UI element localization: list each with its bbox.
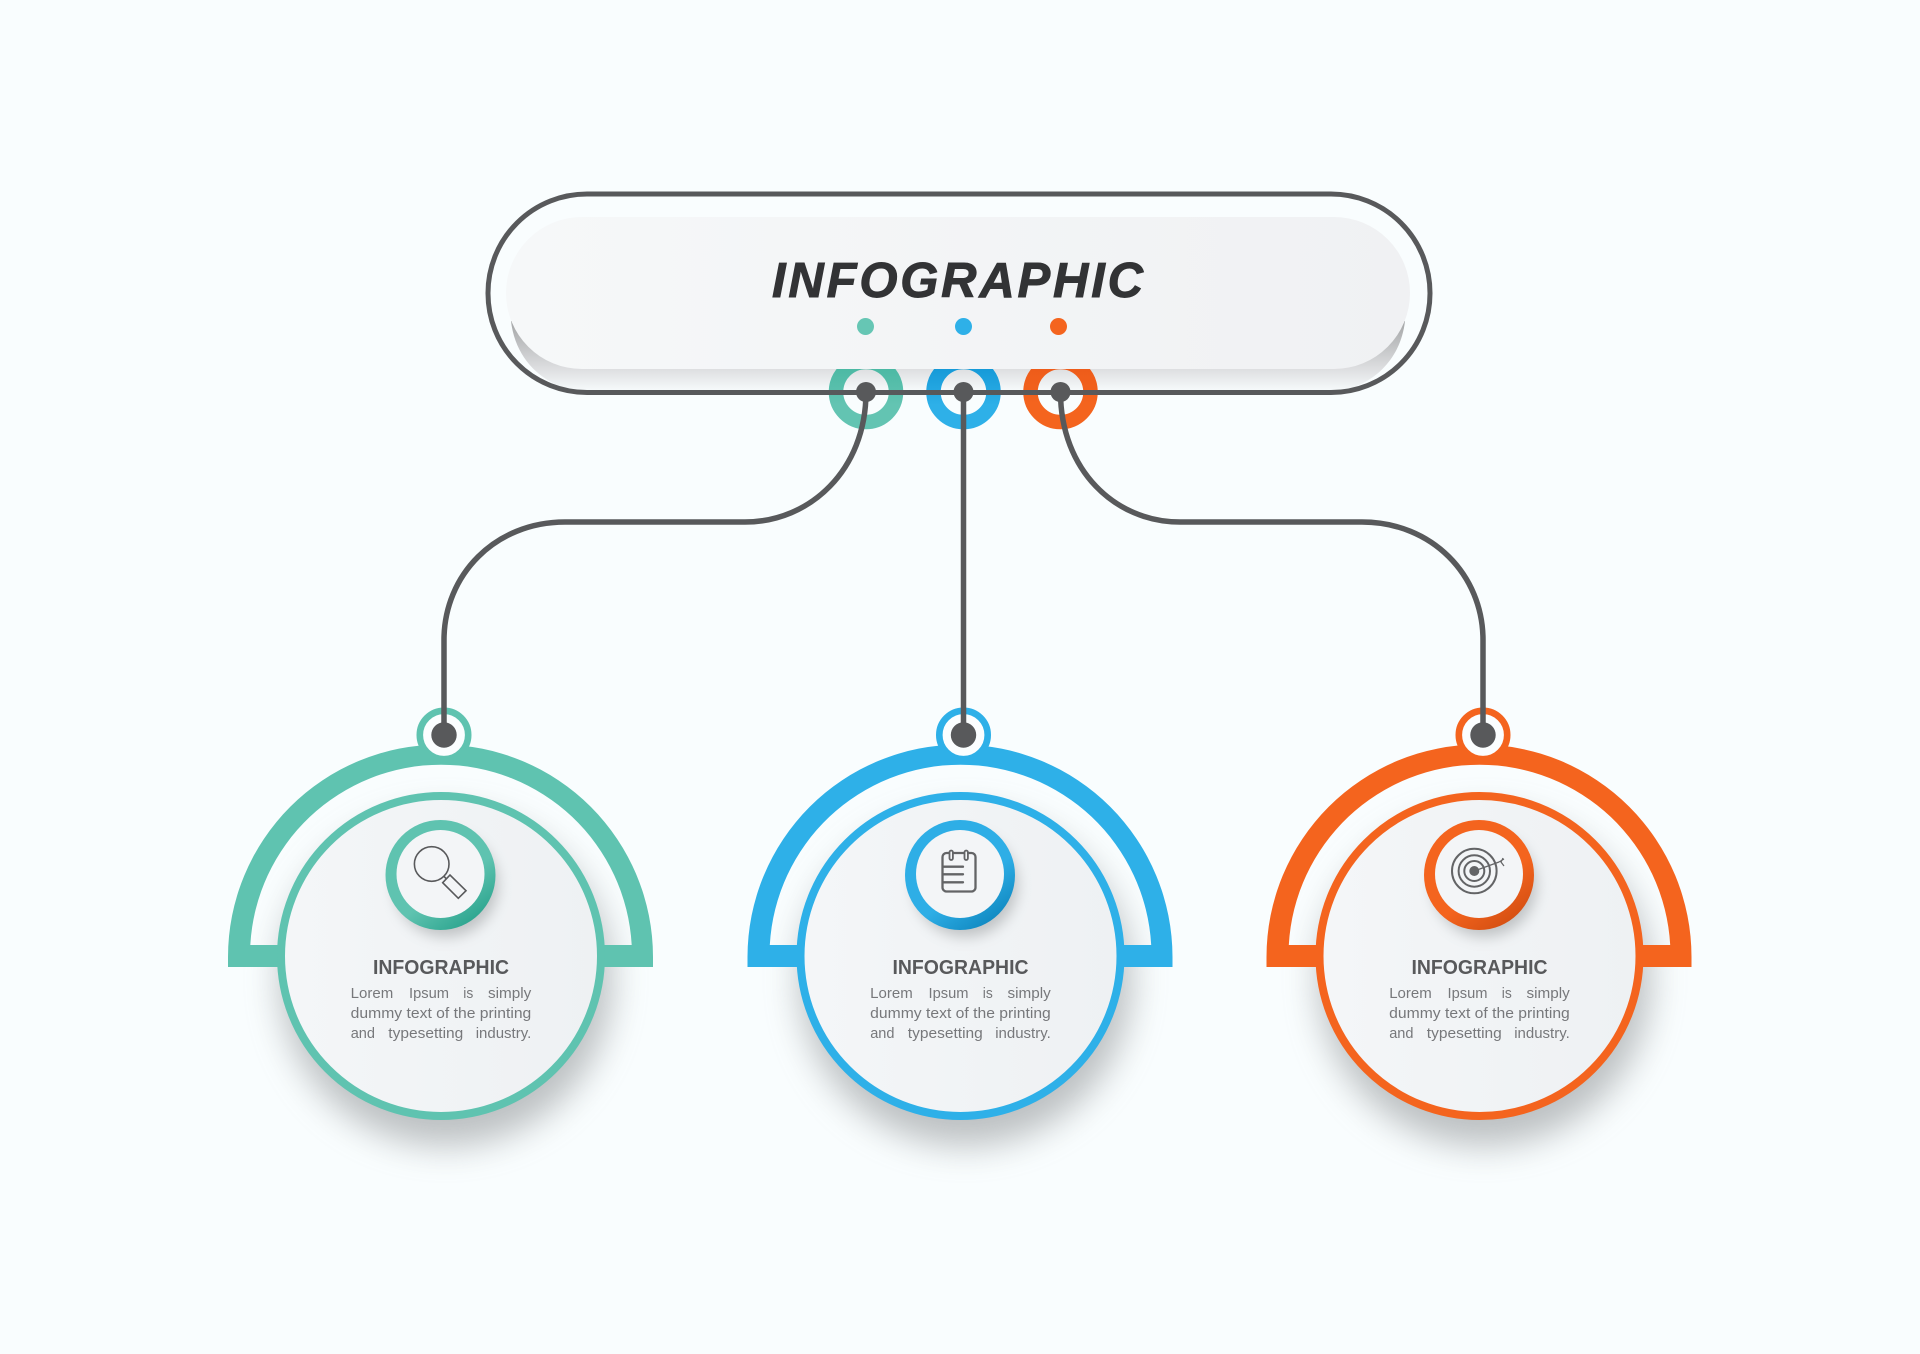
connector lines — [444, 392, 1483, 735]
orange main circle — [1320, 796, 1640, 1116]
blue body text: dummy text of the printing — [870, 1005, 1051, 1022]
teal body text: and — [351, 1025, 375, 1042]
icon: magnifying glass — [414, 847, 466, 898]
blue main circle — [800, 796, 1120, 1116]
panel: blue card — [748, 745, 1172, 1146]
blue icon badge — [905, 820, 1018, 937]
blue body text — [870, 985, 1051, 1042]
orange body text: simply — [1526, 985, 1570, 1002]
orange body text: Ipsum — [1448, 985, 1488, 1002]
orange body text: is — [1502, 985, 1512, 1002]
header colour dots — [857, 318, 1067, 335]
icon: target with arrow — [1452, 849, 1504, 893]
blue body text: typesetting — [908, 1025, 983, 1042]
header connector rings — [836, 362, 1090, 422]
orange heading: INFOGRAPHIC — [1412, 956, 1548, 979]
orange body text: industry. — [1514, 1025, 1570, 1042]
teal body text: simply — [488, 985, 532, 1002]
icon: notepad — [942, 850, 976, 892]
card connector rings — [420, 711, 1507, 759]
blue arch — [748, 745, 1172, 967]
panel: teal card — [228, 745, 653, 1146]
teal body text: industry. — [476, 1025, 531, 1042]
teal icon badge — [386, 820, 498, 937]
blue body text: simply — [1008, 985, 1051, 1002]
orange body text — [1389, 985, 1570, 1042]
blue body text: is — [983, 985, 993, 1002]
teal body text: dummy text of the printing — [351, 1005, 531, 1022]
header outer outline — [488, 194, 1430, 392]
orange body text: Lorem — [1389, 985, 1432, 1002]
teal heading: INFOGRAPHIC — [373, 956, 509, 979]
connector end dots — [431, 382, 1496, 748]
orange card shadow — [1318, 814, 1650, 1146]
header pill shadow — [511, 321, 1405, 393]
panel: header pill — [488, 194, 1430, 422]
teal body text: Ipsum — [409, 985, 449, 1002]
teal card shadow — [280, 814, 612, 1146]
blue card shadow — [800, 814, 1132, 1146]
teal body text: is — [463, 985, 473, 1002]
header inner pill — [506, 217, 1410, 369]
orange icon badge — [1424, 820, 1536, 937]
blue body text: Lorem — [870, 985, 913, 1002]
orange body text: typesetting — [1427, 1025, 1502, 1042]
blue body text: and — [870, 1025, 894, 1042]
teal arch — [228, 745, 653, 967]
orange body text: dummy text of the printing — [1389, 1005, 1570, 1022]
teal body text: typesetting — [388, 1025, 463, 1042]
teal body text: Lorem — [351, 985, 393, 1002]
blue body text: Ipsum — [928, 985, 968, 1002]
title: INFOGRAPHIC — [772, 254, 1144, 308]
orange body text: and — [1389, 1025, 1414, 1042]
blue heading: INFOGRAPHIC — [892, 956, 1029, 979]
panel: orange card — [1266, 744, 1692, 1146]
teal main circle — [281, 796, 601, 1116]
orange arch — [1266, 744, 1692, 967]
teal body text — [351, 985, 532, 1042]
blue body text: industry. — [995, 1025, 1051, 1042]
